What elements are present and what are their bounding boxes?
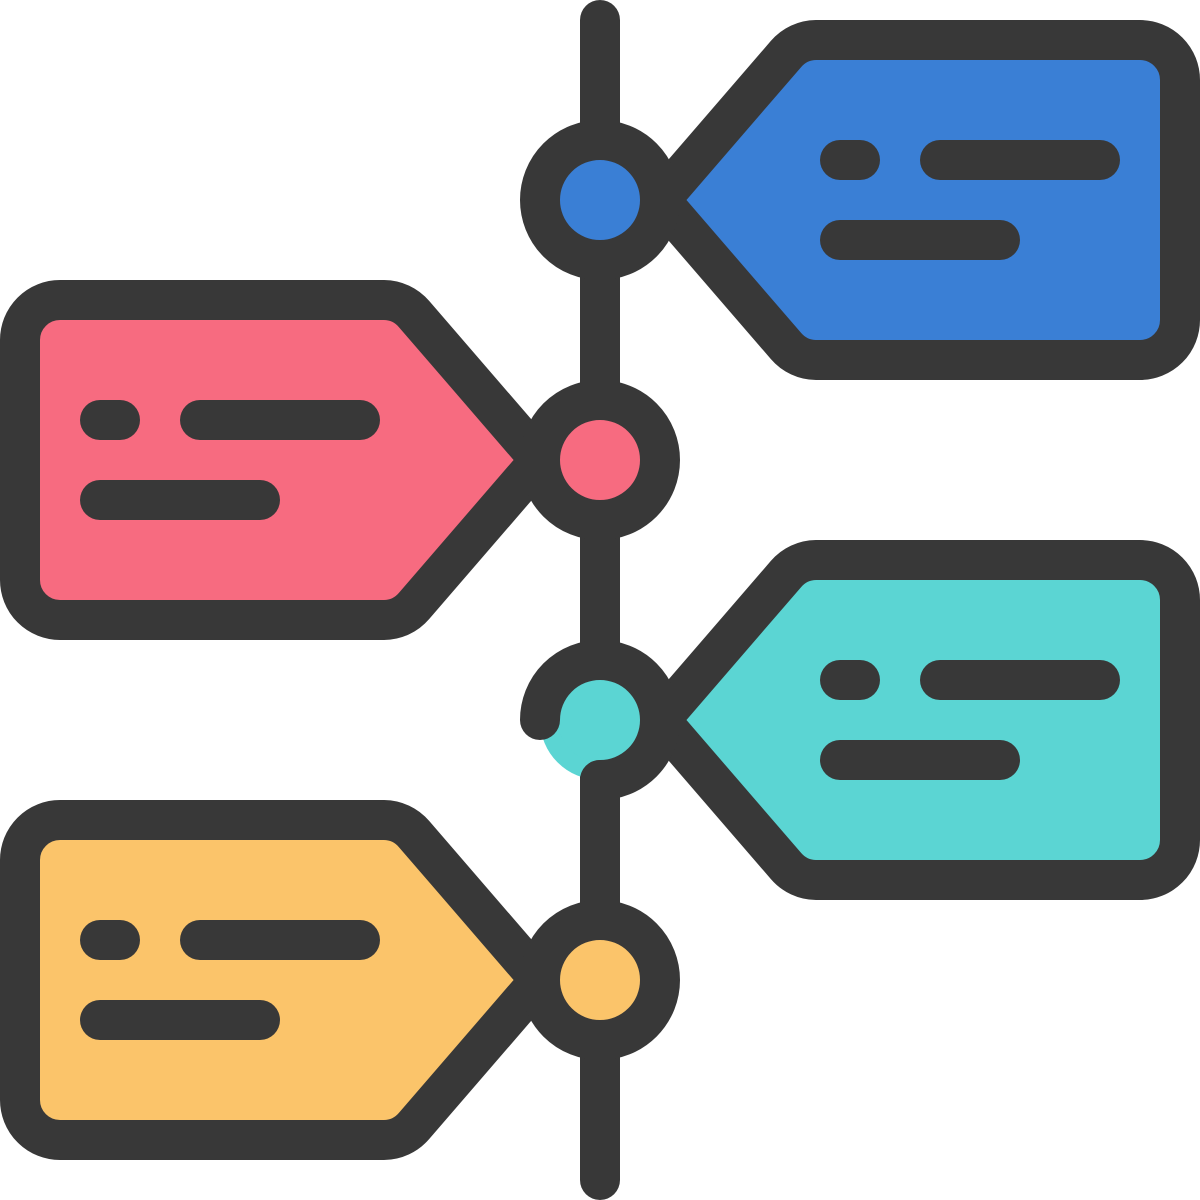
- node: pink circle: [540, 400, 660, 520]
- timeline vertical line: [580, 20, 620, 1180]
- panel: yellow tag: [20, 820, 540, 1140]
- panel: blue tag: [660, 40, 1180, 360]
- node: yellow circle: [540, 920, 660, 1040]
- panel: pink tag: [20, 300, 540, 620]
- node: teal open circle: [540, 660, 660, 900]
- node: blue circle: [540, 140, 660, 260]
- panel: teal tag: [660, 560, 1180, 880]
